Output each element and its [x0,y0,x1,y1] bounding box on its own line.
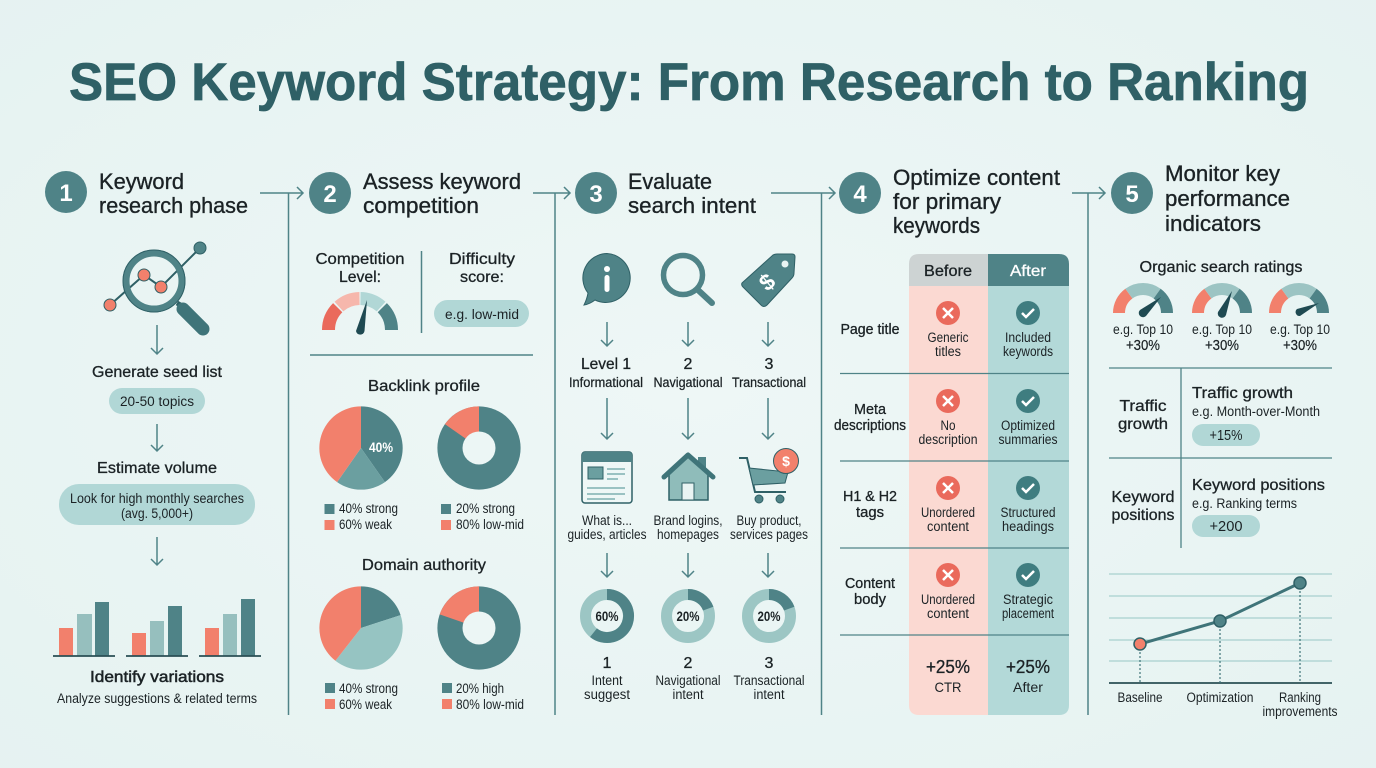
legend: backlink left [324,501,398,532]
table: before column: Before [924,263,972,280]
difficulty score label [449,251,515,286]
arrows: page types to shares [601,553,774,577]
bar chart: variations [53,599,261,656]
row: result metrics: After [1013,679,1043,695]
row: headings [843,476,1056,534]
legend: backlink right: 20% strong [456,501,515,516]
pill: monthly searches [59,484,255,525]
page type descriptions [568,513,808,542]
row: page title: keywords [1003,344,1053,359]
intent level labels [569,356,806,390]
donut: transactional share: 20% [758,609,780,624]
legend: backlink left: 40% strong [339,501,398,516]
row: meta descriptions: summaries [998,432,1058,447]
step 5 heading: Monitor key [1165,161,1280,186]
competition level label: Competition [316,251,404,268]
row: meta descriptions: Meta [854,402,887,418]
legend: domain left [325,681,398,712]
step 5 heading: 5 [1125,181,1139,208]
row: headings: tags [856,505,884,521]
flow connector: step 3 to 4 [771,187,835,715]
KPI: traffic growth: Traffic [1120,398,1166,415]
pill: topics: 20-50 topics [120,394,194,409]
flow connector: step 2 to 3 [533,187,570,715]
KPI: traffic growth: growth [1118,416,1168,433]
KPI: traffic growth: Traffic growth [1192,385,1293,402]
chart axis labels [1118,690,1338,719]
intent captions [584,655,804,702]
row: result metrics: +25% [1006,657,1050,677]
icon: shopping cart: $ [782,453,790,469]
row: page title: Generic [928,330,969,345]
row: result metrics: CTR [934,679,962,695]
arrow [151,537,163,565]
legend: backlink left: 60% weak [339,517,392,532]
legend: backlink right: 80% low-mid [456,517,524,532]
row: meta descriptions: descriptions [834,418,906,434]
intent level labels: 2 [684,356,693,373]
page type descriptions: What is... [582,513,632,528]
row: meta descriptions [834,389,1058,447]
step 4 heading: 4 [853,181,867,208]
step 1 heading: research phase [99,193,248,218]
icon: magnifier over trend line [104,242,206,329]
KPI: keyword positions: e.g. Ranking terms [1192,496,1297,511]
donut: navigational share [666,594,710,638]
intent captions: Transactional [734,673,804,688]
KPI: traffic growth: +15% [1210,428,1243,444]
row: content body: content [927,606,969,621]
step 4 heading: for primary [893,189,1001,214]
flow connector: step 1 to 2 [260,187,303,715]
row: headings: H1 & H2 [843,489,897,505]
pill: low-mid: e.g. low-mid [445,307,519,322]
page type descriptions: guides, articles [568,527,647,542]
difficulty score label: score: [460,269,504,286]
panel: step 5 monitor KPIs [1109,161,1338,719]
intent level labels: Level 1 [581,356,631,373]
pill: low-mid [434,300,529,327]
backlink heading: Backlink profile [368,378,480,395]
step 2 heading: Assess keyword [363,169,521,194]
table: before column [909,254,988,715]
row: meta descriptions: Optimized [1001,418,1055,433]
gauge captions: e.g. Top 10 [1270,322,1330,337]
legend: domain right: 20% high [456,681,504,696]
row: page title: Page title [840,322,900,338]
icon: price tag: $ [754,268,780,296]
row: meta descriptions: No [940,418,956,433]
KPI: traffic growth [1118,385,1320,446]
divider [310,354,533,356]
intent captions: 1 [603,655,612,672]
table: after column: After [1010,263,1047,280]
KPI: keyword positions: +200 [1210,519,1242,535]
pie: backlink strong vs weak: 40% [369,439,393,455]
row: result metrics [926,657,1050,695]
row: page title [840,301,1053,359]
legend: domain right: 80% low-mid [456,697,524,712]
identify variations text [57,669,257,706]
intent level labels: 3 [765,356,774,373]
row: headings: content [927,519,969,534]
chart axis labels: Ranking [1279,690,1321,705]
flow connector: step 4 to 5 [1072,187,1105,715]
competition level label [316,251,404,286]
pill: monthly searches: Look for high monthly searches [70,491,244,506]
intent captions: Navigational [656,673,720,688]
step 1 heading: Keyword [99,169,184,194]
step 5 heading [1111,161,1290,236]
step 3 heading: search intent [628,193,756,218]
row: content body: placement [1002,606,1054,621]
intent captions: 3 [765,655,774,672]
identify variations text: Identify variations [90,669,224,686]
icon: web page [582,452,632,503]
estimate volume label: Estimate volume [97,460,217,477]
step 2 heading [309,169,521,218]
chart axis labels: Baseline [1118,690,1162,705]
page type descriptions: Buy product, [736,513,802,528]
intent level labels: Navigational [654,375,722,390]
divider [420,251,422,333]
icon: shopping cart [739,448,798,503]
panel: step 2 competition [309,169,533,712]
gauge captions: e.g. Top 10 [1192,322,1252,337]
legend: domain left: 60% weak [339,697,392,712]
arrow [151,424,163,451]
KPI: keyword positions: Keyword [1112,489,1174,506]
panel: step 1 keyword research [45,169,261,706]
legend: domain right [442,681,524,712]
page type descriptions: homepages [657,527,719,542]
panel: step 4 optimize content [834,165,1069,715]
step 3 heading [575,169,756,218]
difficulty score label: Difficulty [449,251,515,268]
domain authority heading: Domain authority [362,557,486,574]
gauge: rating 1 [1119,289,1167,317]
intent level labels: Informational [569,375,643,390]
intent captions: Intent [592,673,623,688]
page type descriptions: services pages [730,527,808,542]
row: content body: Strategic [1003,592,1053,607]
icon: magnifier [664,256,712,303]
KPI: keyword positions [1112,477,1325,537]
gauge captions [1113,322,1330,354]
row: meta descriptions: description [918,432,978,447]
pie: backlink strong vs weak [319,406,403,490]
chart axis labels: Optimization [1186,690,1254,705]
organic ratings heading: Organic search ratings [1140,259,1303,276]
KPI: keyword positions: positions [1112,507,1174,524]
legend: backlink right [441,501,524,532]
row: headings: headings [1002,519,1054,534]
step 4 heading: Optimize content [893,165,1060,190]
intent captions: suggest [584,687,630,702]
intent captions: intent [754,687,785,702]
donut: transactional share [748,594,790,638]
arrows: icons to levels [601,322,774,346]
row: content body: Content [845,576,895,592]
step 1 heading: 1 [59,180,73,207]
step 5 heading: performance [1165,186,1290,211]
icon: price tag [742,254,795,306]
KPI: traffic growth: e.g. Month-over-Month [1192,404,1320,419]
gauge: rating 2 [1198,289,1246,318]
KPI: keyword positions: Keyword positions [1192,477,1325,494]
donut: navigational share: 20% [676,609,700,624]
donut: informational share: 60% [596,609,618,624]
step 4 heading [839,165,1060,238]
donut: backlink low-mid [437,406,521,490]
row: headings: Unordered [921,505,975,520]
intent captions: 2 [684,655,693,672]
row: headings: Structured [1000,505,1056,520]
row: content body: Unordered [921,592,975,607]
pie: domain authority [319,586,403,670]
legend: domain left: 40% strong [339,681,398,696]
donut: domain authority [437,586,521,670]
donut: informational share [586,594,629,638]
arrows: levels to page types [601,398,774,439]
line chart: ranking improvement [1109,574,1332,683]
step 4 heading: keywords [893,213,980,238]
step 5 heading: indicators [1165,211,1261,236]
identify variations text: Analyze suggestions & related terms [57,691,257,706]
KPI dividers [1109,368,1332,548]
pill: topics [109,388,205,414]
step 1 heading [45,169,248,218]
row: content body [845,563,1054,621]
icon: house [664,455,713,500]
step 3 heading: Evaluate [628,169,712,194]
gauge captions: +30% [1283,338,1317,354]
table: after column [988,254,1069,715]
gauge captions: e.g. Top 10 [1113,322,1173,337]
title: SEO Keyword Strategy: From Research to Ranking [69,53,1309,112]
step 2 heading: 2 [323,181,337,208]
intent level labels: Transactional [732,375,806,390]
row: content body: body [854,592,887,608]
seed list label: Generate seed list [92,364,223,381]
gauge: rating 3 [1275,289,1323,316]
arrow [151,325,163,354]
step 3 heading: 3 [589,181,603,208]
intent captions: intent [672,687,704,702]
gauge captions: +30% [1126,338,1160,354]
page type descriptions: Brand logins, [654,513,722,528]
row: page title: titles [935,344,961,359]
row: page title: Included [1005,330,1051,345]
panel: step 3 search intent [568,169,808,702]
gauge captions: +30% [1205,338,1239,354]
row: result metrics: +25% [926,657,970,677]
pill: monthly searches: (avg. 5,000+) [121,506,193,521]
icon: info bubble [583,254,630,305]
competition level label: Level: [339,269,381,286]
step 2 heading: competition [363,193,479,218]
chart axis labels: improvements [1262,704,1338,719]
gauge: competition [328,298,392,335]
row dividers [840,374,1069,635]
